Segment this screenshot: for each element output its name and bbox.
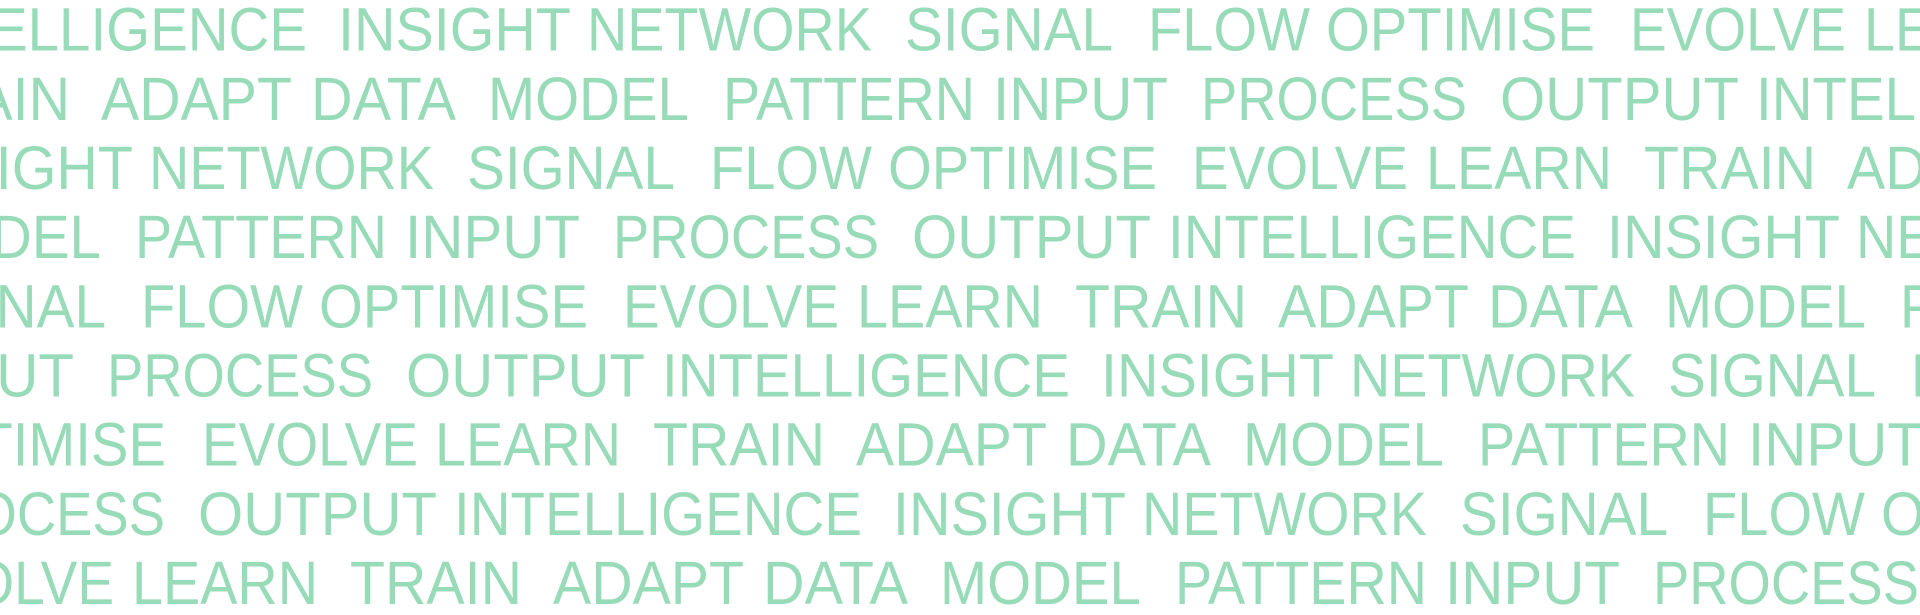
row 5 of words: LEARN bbox=[857, 272, 1043, 340]
row 2 of words: DATA bbox=[311, 65, 456, 133]
row 9 of words: MODEL bbox=[940, 549, 1141, 615]
row 4 of words: PATTERN bbox=[135, 203, 387, 271]
row 8 of words: FLOW bbox=[1703, 480, 1865, 548]
row 8 of words bbox=[0, 480, 1920, 548]
row 5 of words: OPTIMISE bbox=[319, 272, 588, 340]
row 5 of words: EVOLVE bbox=[623, 272, 839, 340]
row 2 of words: INPUT bbox=[993, 65, 1168, 133]
row 6 of words: PROCESS bbox=[107, 342, 373, 410]
row 3 of words bbox=[0, 134, 1920, 202]
row 9 of words bbox=[0, 549, 1919, 615]
row 1 of words bbox=[0, 0, 1920, 64]
row 5 of words: FLOW bbox=[141, 272, 303, 340]
row 6 of words: NETWORK bbox=[1350, 342, 1635, 410]
row 5 of words bbox=[0, 272, 1920, 340]
row 2 of words: PATTERN bbox=[723, 65, 975, 133]
row 3 of words: EVOLVE bbox=[1192, 134, 1408, 202]
row 3 of words: LEARN bbox=[1426, 134, 1612, 202]
row 3 of words: OPTIMISE bbox=[888, 134, 1157, 202]
row 6 of words: INSIGHT bbox=[1101, 342, 1334, 410]
row 2 of words bbox=[0, 65, 1920, 133]
row 4 of words: INSIGHT bbox=[1607, 203, 1840, 271]
row 8 of words: INSIGHT bbox=[893, 480, 1126, 548]
row 4 of words: PROCESS bbox=[613, 203, 879, 271]
row 2 of words: OUTPUT bbox=[1500, 65, 1739, 133]
row 6 of words bbox=[0, 342, 1920, 410]
row 5 of words: ADAPT bbox=[1278, 272, 1469, 340]
row 5 of words: MODEL bbox=[1665, 272, 1866, 340]
row 9 of words: ADAPT bbox=[553, 549, 744, 615]
row 2 of words: ADAPT bbox=[101, 65, 292, 133]
row 9 of words: LEARN bbox=[132, 549, 318, 615]
row 4 of words: INTELLIGENCE bbox=[1168, 203, 1576, 271]
row 3 of words: SIGNAL bbox=[467, 134, 675, 202]
row 5 of words: DATA bbox=[1488, 272, 1633, 340]
row 6 of words: OUTPUT bbox=[406, 342, 645, 410]
row 3 of words: TRAIN bbox=[1644, 134, 1816, 202]
row 9 of words: PATTERN bbox=[1175, 549, 1427, 615]
row 4 of words: OUTPUT bbox=[912, 203, 1151, 271]
row 8 of words: NETWORK bbox=[1142, 480, 1427, 548]
row 4 of words bbox=[0, 203, 1920, 271]
row 7 of words: TRAIN bbox=[653, 411, 825, 479]
row 7 of words: PATTERN bbox=[1478, 411, 1730, 479]
row 7 of words: EVOLVE bbox=[202, 411, 418, 479]
row 2 of words: PROCESS bbox=[1201, 65, 1467, 133]
row 5 of words: TRAIN bbox=[1075, 272, 1247, 340]
row 7 of words: ADAPT bbox=[856, 411, 1047, 479]
row 8 of words: SIGNAL bbox=[1460, 480, 1668, 548]
row 7 of words bbox=[0, 411, 1920, 479]
row 7 of words: DATA bbox=[1066, 411, 1211, 479]
row 2 of words: MODEL bbox=[488, 65, 689, 133]
row 7 of words: LEARN bbox=[435, 411, 621, 479]
row 3 of words: FLOW bbox=[710, 134, 872, 202]
row 4 of words: INPUT bbox=[405, 203, 580, 271]
row 3 of words: NETWORK bbox=[149, 134, 434, 202]
row 7 of words: MODEL bbox=[1243, 411, 1444, 479]
row 9 of words: DATA bbox=[763, 549, 908, 615]
row 9 of words: INPUT bbox=[1445, 549, 1620, 615]
row 6 of words: INTELLIGENCE bbox=[662, 342, 1070, 410]
row 9 of words: TRAIN bbox=[350, 549, 522, 615]
row 8 of words: OUTPUT bbox=[198, 480, 437, 548]
row 8 of words: INTELLIGENCE bbox=[454, 480, 862, 548]
row 6 of words: SIGNAL bbox=[1668, 342, 1876, 410]
